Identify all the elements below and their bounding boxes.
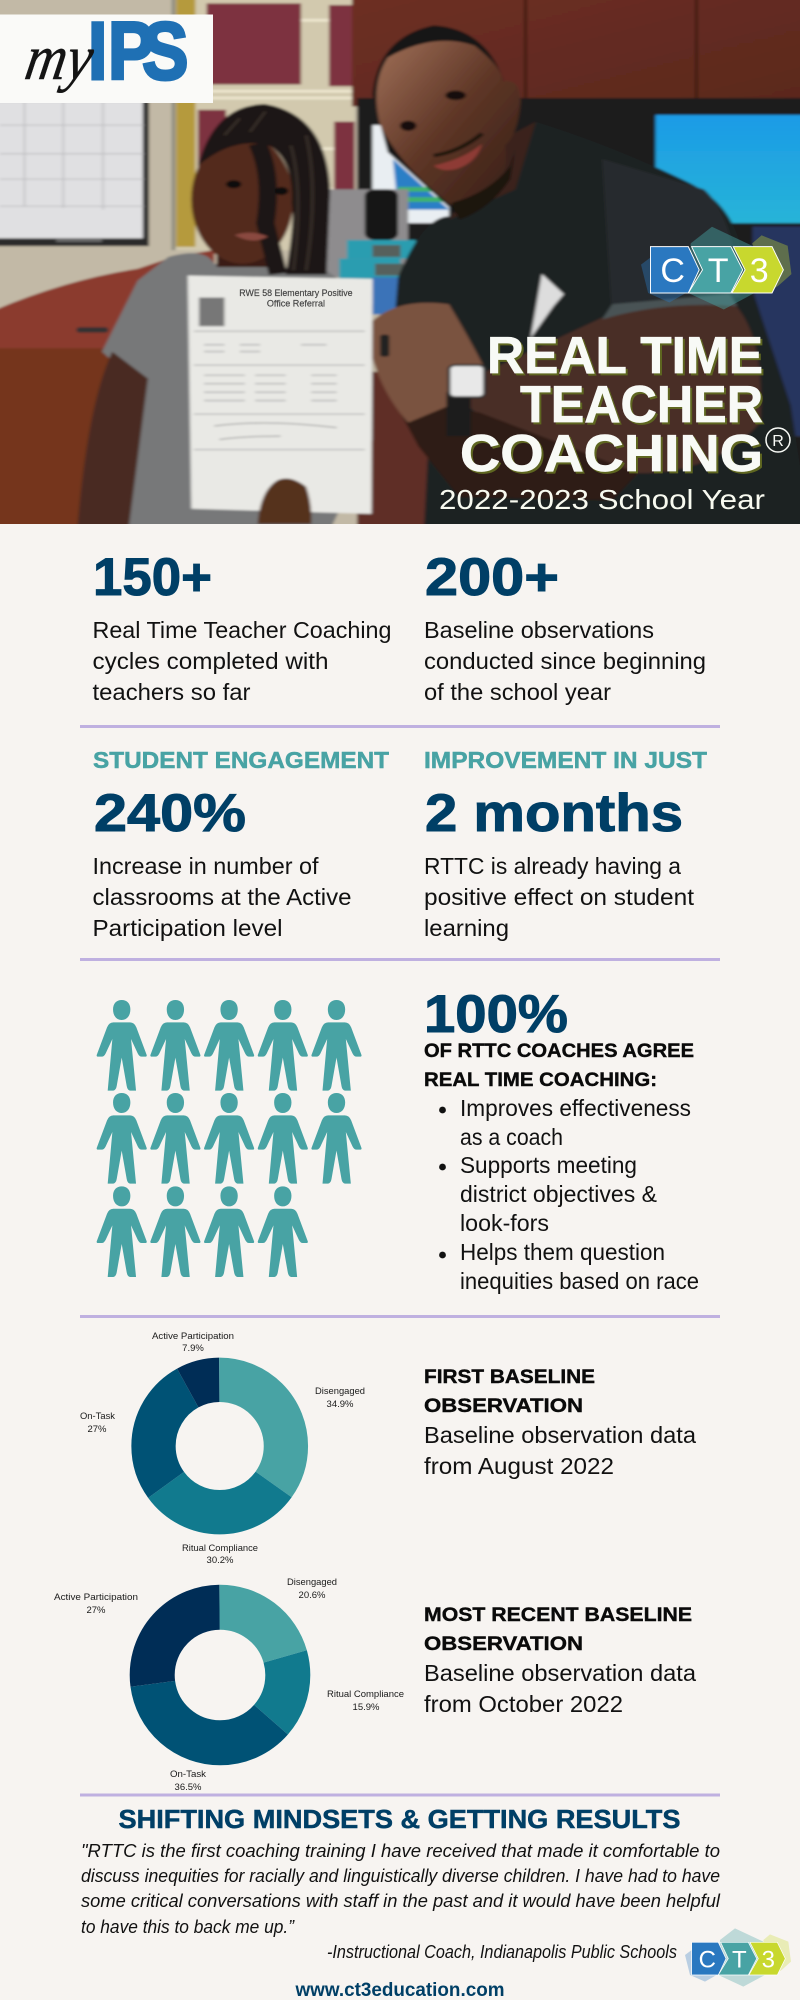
donut chart: most recent baseline: Active Participation [54, 1592, 138, 1603]
hero photo: teacher and student holding referral [0, 0, 800, 524]
most recent baseline text: from October 2022 [424, 1691, 623, 1717]
stat: 150+ cycles: Real Time Teacher Coaching [92, 617, 392, 643]
stat: 200+ observations [424, 548, 706, 705]
myIPS logo: my [21, 22, 99, 93]
stat: 200+ observations: 200+ [425, 548, 559, 607]
donut chart: first baseline: Disengaged [315, 1386, 365, 1397]
testimonial quote: to have this to back me up.” [81, 1917, 295, 1937]
registered mark: R [772, 433, 784, 450]
stat: 200+ observations: Baseline observations [424, 617, 654, 643]
donut chart: first baseline: 27% [87, 1424, 107, 1435]
stat: 150+ cycles: cycles completed with [92, 648, 328, 674]
first baseline text: from August 2022 [424, 1453, 614, 1479]
testimonial quote [81, 1841, 721, 1937]
testimonial quote: "RTTC is the first coaching training I have received that made it comfortable to [81, 1841, 720, 1861]
hero title: COACHING [460, 425, 763, 483]
donut chart: most recent baseline: Ritual Compliance [327, 1689, 404, 1700]
donut chart: most recent baseline: Disengaged [287, 1577, 337, 1588]
donut chart: first baseline: On-Task [80, 1411, 115, 1422]
donut chart: first baseline: 30.2% [207, 1555, 234, 1566]
most recent baseline text [424, 1604, 696, 1717]
referral form heading [239, 289, 353, 309]
benefits list: district objectives & [460, 1181, 657, 1207]
donut chart: most recent baseline: 27% [86, 1605, 106, 1616]
CT3 logo: top: C [660, 252, 685, 290]
first baseline text: FIRST BASELINE [424, 1366, 595, 1388]
donut chart: first baseline: 34.9% [327, 1399, 354, 1410]
most recent baseline text: MOST RECENT BASELINE [424, 1604, 692, 1626]
stat: 150+ cycles [92, 548, 392, 705]
first baseline text: OBSERVATION [424, 1395, 583, 1417]
stat: 200+ observations: conducted since beginning [424, 648, 706, 674]
benefits list [439, 1095, 699, 1294]
registered mark [766, 428, 790, 452]
quote attribution: -Instructional Coach, Indianapolis Public Schools [327, 1942, 677, 1962]
donut chart: first baseline: 7.9% [182, 1343, 204, 1354]
donut chart: most recent baseline [54, 1577, 404, 1793]
referral form heading: RWE 58 Elementary Positive [239, 289, 353, 298]
CT3 logo: top: 3 [750, 252, 769, 290]
most recent baseline text: OBSERVATION [424, 1633, 583, 1655]
stat: 150+ cycles: 150+ [93, 548, 212, 607]
stat: 100% of coaches agree: 100% [424, 985, 568, 1044]
stat: 150+ cycles: teachers so far [92, 679, 251, 705]
testimonial quote: some critical conversations with staff in the past and it would have been helpful [81, 1891, 721, 1911]
stat: 100% of coaches agree: OF RTTC COACHES AGREE [424, 1040, 694, 1062]
stat: improvement in 2 months: 2 months [425, 784, 683, 843]
hero title: TEACHER [520, 376, 763, 434]
benefits list: Improves effectiveness [460, 1095, 691, 1121]
CT3 logo: footer: T [732, 1946, 747, 1973]
section heading: SHIFTING MINDSETS & GETTING RESULTS [118, 1804, 680, 1834]
stat: student engagement 240%: STUDENT ENGAGEMENT [93, 747, 389, 773]
donut chart: first baseline [80, 1331, 365, 1566]
stat: improvement in 2 months [424, 747, 707, 941]
stat: student engagement 240% [92, 747, 389, 941]
school year subtitle: 2022-2023 School Year [439, 484, 765, 515]
pictogram: 14 coaches [97, 1000, 362, 1277]
donut chart: most recent baseline: On-Task [170, 1769, 206, 1780]
benefits list: look-fors [460, 1210, 549, 1236]
testimonial quote: discuss inequities for racially and linguistically diverse children. I have had to have [81, 1866, 720, 1886]
donut chart: most recent baseline: 15.9% [353, 1702, 380, 1713]
stat: student engagement 240%: classrooms at the Active [92, 884, 352, 910]
CT3 logo: footer: 3 [762, 1946, 775, 1973]
first baseline text: Baseline observation data [424, 1422, 696, 1448]
CT3 logo: footer: C [699, 1946, 716, 1973]
myIPS logo: IPS [88, 6, 188, 97]
stat: improvement in 2 months: positive effect on student [424, 884, 695, 910]
stat: 200+ observations: of the school year [424, 679, 611, 705]
benefits list: as a coach [460, 1124, 563, 1150]
hero title [460, 327, 763, 483]
stat: student engagement 240%: 240% [94, 784, 246, 843]
stat: student engagement 240%: Increase in number of [92, 853, 319, 879]
donut chart: first baseline: Active Participation [152, 1331, 234, 1342]
stat: 100% of coaches agree [424, 985, 699, 1294]
stat: 100% of coaches agree: REAL TIME COACHING: [424, 1069, 657, 1091]
benefits list: inequities based on race [460, 1268, 699, 1294]
benefits list: Helps them question [460, 1239, 665, 1265]
most recent baseline text: Baseline observation data [424, 1660, 696, 1686]
myIPS logo [0, 6, 213, 103]
stat: improvement in 2 months: IMPROVEMENT IN JUST [424, 747, 707, 773]
CT3 logo: footer [685, 1928, 791, 1987]
hero title: REAL TIME [487, 327, 763, 385]
first baseline text [424, 1366, 696, 1479]
stat: improvement in 2 months: RTTC is already having a [424, 853, 681, 879]
referral form heading: Office Referral [267, 299, 325, 309]
CT3 logo: top [641, 227, 791, 310]
CT3 logo: top: T [708, 252, 729, 290]
donut chart: most recent baseline: 36.5% [175, 1782, 202, 1793]
stat: improvement in 2 months: learning [424, 915, 509, 941]
donut chart: first baseline: Ritual Compliance [182, 1543, 258, 1554]
stat: student engagement 240%: Participation level [92, 915, 282, 941]
donut chart: most recent baseline: 20.6% [299, 1590, 326, 1601]
benefits list: Supports meeting [460, 1152, 637, 1178]
